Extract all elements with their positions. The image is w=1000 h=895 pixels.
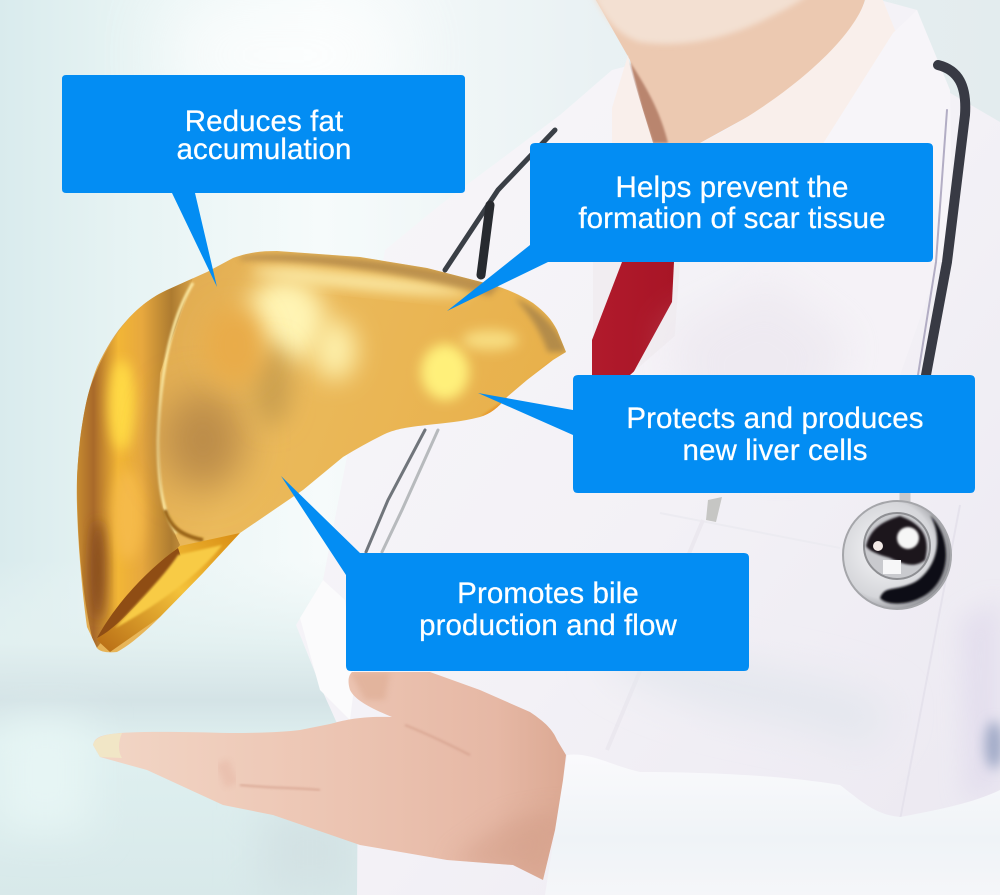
- callout: helps prevent scar tissue: [447, 143, 933, 311]
- doctor: right lapel: [760, 10, 953, 262]
- doctor: red tie: [592, 262, 674, 375]
- liver: lower fold: [97, 533, 240, 652]
- doctor: chin: [593, 0, 808, 44]
- doctor: coat lapel shading: [630, 262, 940, 375]
- stethoscope: tubes: [366, 65, 965, 552]
- liver: left lobe: [77, 272, 195, 650]
- doctor: sleeve: [545, 755, 1000, 895]
- pen in pocket: [706, 497, 722, 522]
- doctor: coat pocket seams: [607, 505, 960, 820]
- liver: [77, 251, 566, 652]
- doctor: coat: [296, 0, 1000, 895]
- callout: reduces fat accumulation: Reduces fat: [185, 105, 343, 138]
- callout: helps prevent scar tissue: formation of scar tissue: [578, 202, 886, 235]
- callout: protects and produces new liver cells: Protects and produces: [626, 402, 924, 435]
- callout: reduces fat accumulation: [62, 75, 465, 287]
- callout: helps prevent scar tissue: Helps prevent the: [616, 171, 848, 204]
- callout: protects and produces new liver cells: new liver cells: [682, 434, 868, 467]
- callout: promotes bile production and flow: Promotes bile: [457, 577, 639, 610]
- callout: promotes bile production and flow: [281, 476, 749, 671]
- hand: fingernails: [93, 733, 122, 758]
- liver: right tip shading: [515, 298, 566, 352]
- liver: main lobe seam: [158, 283, 193, 533]
- callout: promotes bile production and flow: production and flow: [419, 609, 677, 642]
- doctor: coat shadow right: [960, 600, 1000, 800]
- callout: protects and produces new liver cells: [478, 375, 975, 493]
- callout: reduces fat accumulation: accumulation: [176, 133, 352, 166]
- stethoscope: chest piece: [843, 501, 951, 609]
- hand: creases: [222, 725, 470, 790]
- doctor: neck: [593, 0, 866, 143]
- doctor: shirt front: [593, 262, 680, 375]
- doctor: neck shadow: [630, 62, 668, 143]
- liver: top edge shading: [240, 254, 500, 296]
- doctor: shirt collar: [612, 0, 945, 262]
- doctor: left sleeve shading: [300, 580, 355, 720]
- hand: lower palm shading: [466, 820, 556, 876]
- liver: highlights: [245, 278, 325, 362]
- hand: thumb shading: [350, 672, 390, 700]
- hand: [93, 672, 566, 880]
